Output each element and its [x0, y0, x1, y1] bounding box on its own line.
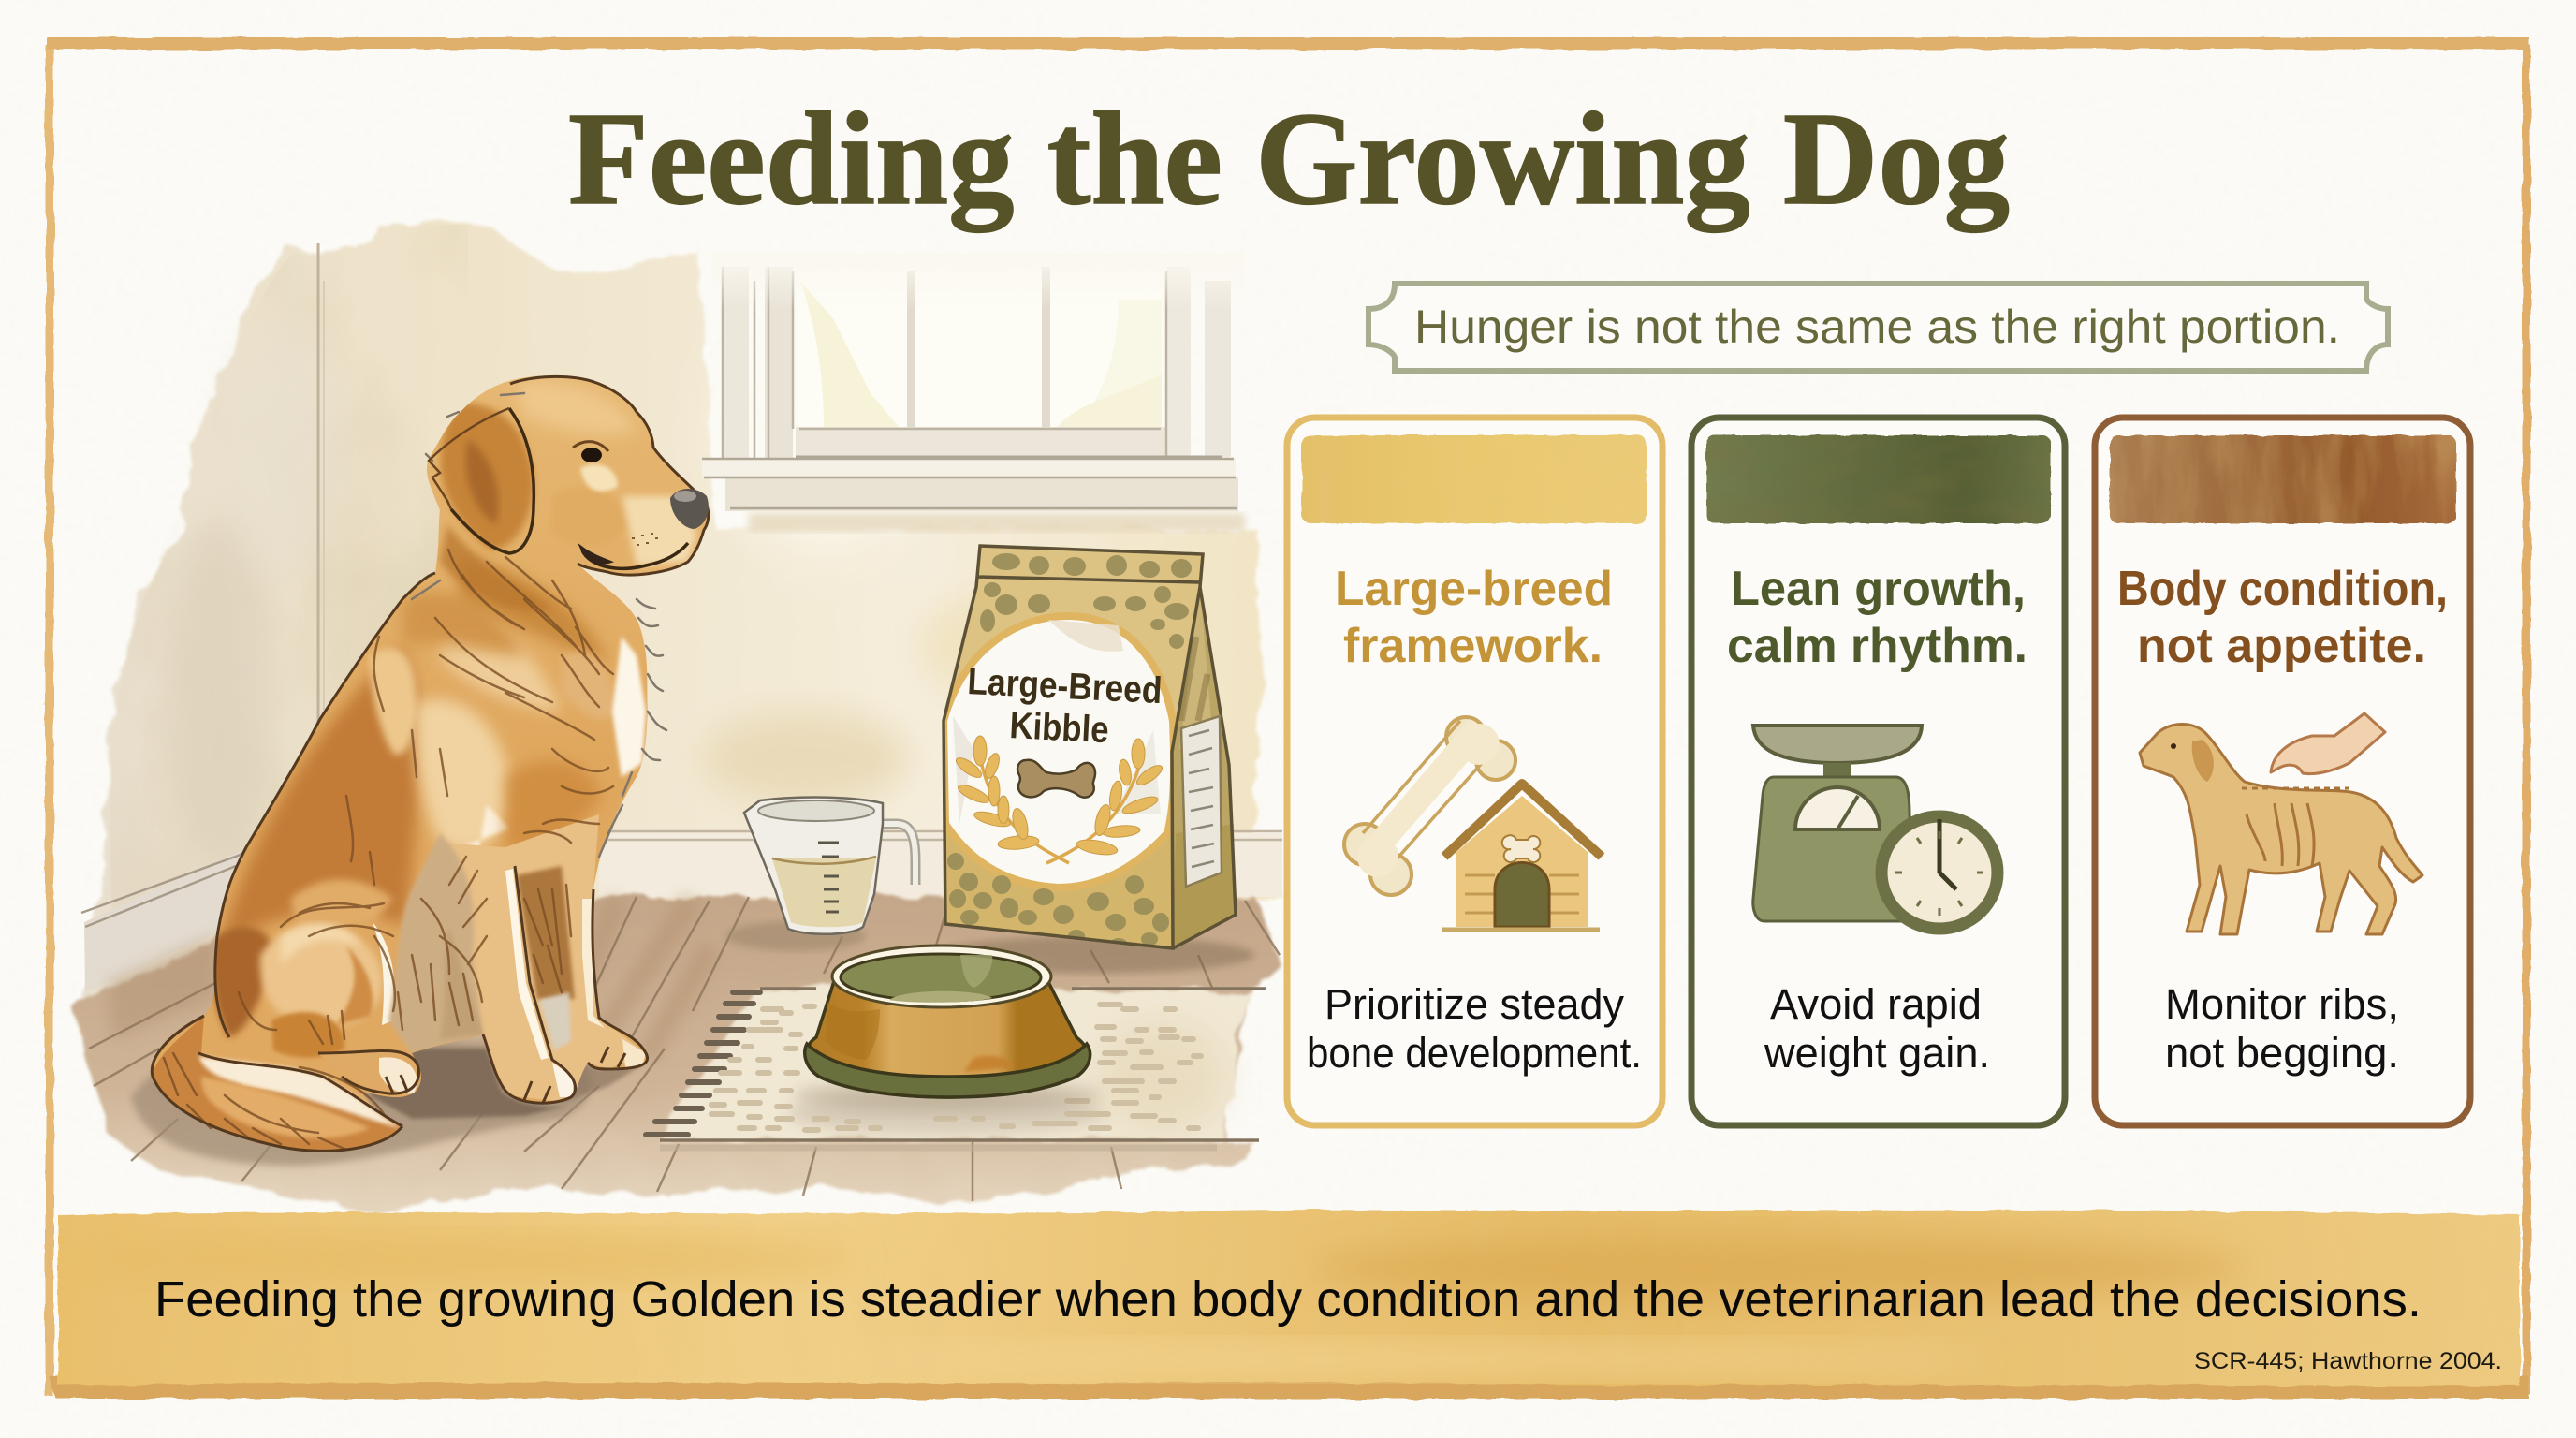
banner message: Feeding the growing Golden is steadier when body condition and the veterinarian lead the decisions. — [154, 1271, 2422, 1328]
callout: hunger message — [1368, 284, 2388, 371]
bottom banner — [49, 1210, 2529, 1399]
dog nose — [670, 489, 709, 529]
body text: lean growth: Avoid rapid — [1770, 980, 1982, 1028]
rug — [646, 989, 1266, 1148]
wood floor — [73, 897, 1284, 1212]
dog eye — [581, 448, 602, 462]
heading: large-breed framework: framework. — [1343, 619, 1603, 673]
food bowl — [793, 946, 1102, 1110]
body text: large-breed — [1307, 980, 1642, 1077]
lower chest and front legs — [440, 814, 646, 1103]
icon: bone and doghouse — [1344, 717, 1602, 930]
heading: body condition: not appetite. — [2137, 619, 2426, 673]
source note: SCR-445; Hawthorne 2004. — [2194, 1348, 2502, 1374]
heading: lean growth: calm rhythm. — [1727, 619, 2027, 673]
body text: body condition — [2165, 980, 2399, 1077]
dog outline — [152, 376, 709, 1151]
fur washes — [225, 646, 420, 946]
bag label text: Kibble — [1009, 705, 1110, 751]
fur strokes — [164, 550, 613, 1150]
hind paw — [320, 1054, 339, 1060]
dog mouth — [582, 543, 688, 568]
panel: body condition — [2095, 418, 2470, 1125]
title: Feeding the Growing Dog — [568, 84, 2010, 232]
heading: body condition: Body condition, — [2117, 562, 2448, 616]
body text: body condition: not begging. — [2165, 1029, 2399, 1077]
bag laurel — [953, 736, 1165, 863]
tail — [153, 1016, 402, 1151]
heading: lean growth — [1727, 562, 2027, 673]
kibble bag — [936, 546, 1254, 974]
heading: large-breed framework: Large-breed — [1335, 562, 1613, 616]
icon: scale and clock — [1753, 726, 2003, 934]
golden retriever — [152, 375, 709, 1151]
illustration: dog in kitchen scene — [73, 218, 1284, 1212]
dog coat — [152, 375, 709, 1151]
head washes — [441, 403, 534, 550]
bag label text: Large-Breed — [967, 661, 1163, 712]
bag bone — [1017, 760, 1095, 798]
heading: large-breed framework — [1335, 562, 1613, 673]
measuring cup — [725, 798, 915, 951]
swatch: brown — [2110, 435, 2456, 523]
heading: body condition — [2117, 562, 2448, 673]
wall wash — [84, 218, 1284, 1002]
banner wash — [49, 1210, 2529, 1399]
swatch: gold — [1302, 435, 1647, 523]
icon: dog being checked — [2140, 713, 2422, 934]
callout: hunger message: Hunger is not the same as the right portion. — [1414, 301, 2340, 353]
body text: lean growth — [1764, 980, 1990, 1077]
swatch: olive — [1706, 435, 2051, 523]
bag label text — [967, 661, 1163, 751]
heading: lean growth: Lean growth, — [1731, 562, 2026, 616]
baseboard — [81, 831, 1282, 992]
dog ear — [451, 408, 534, 553]
panel: lean growth — [1691, 418, 2065, 1125]
body text: lean growth: weight gain. — [1764, 1029, 1990, 1077]
window — [702, 253, 1245, 532]
panel: large-breed framework — [1287, 418, 1662, 1125]
body text: body condition: Monitor ribs, — [2165, 980, 2399, 1028]
body text: large-breed: bone development. — [1307, 1029, 1642, 1077]
body text: large-breed: Prioritize steady — [1325, 980, 1624, 1028]
